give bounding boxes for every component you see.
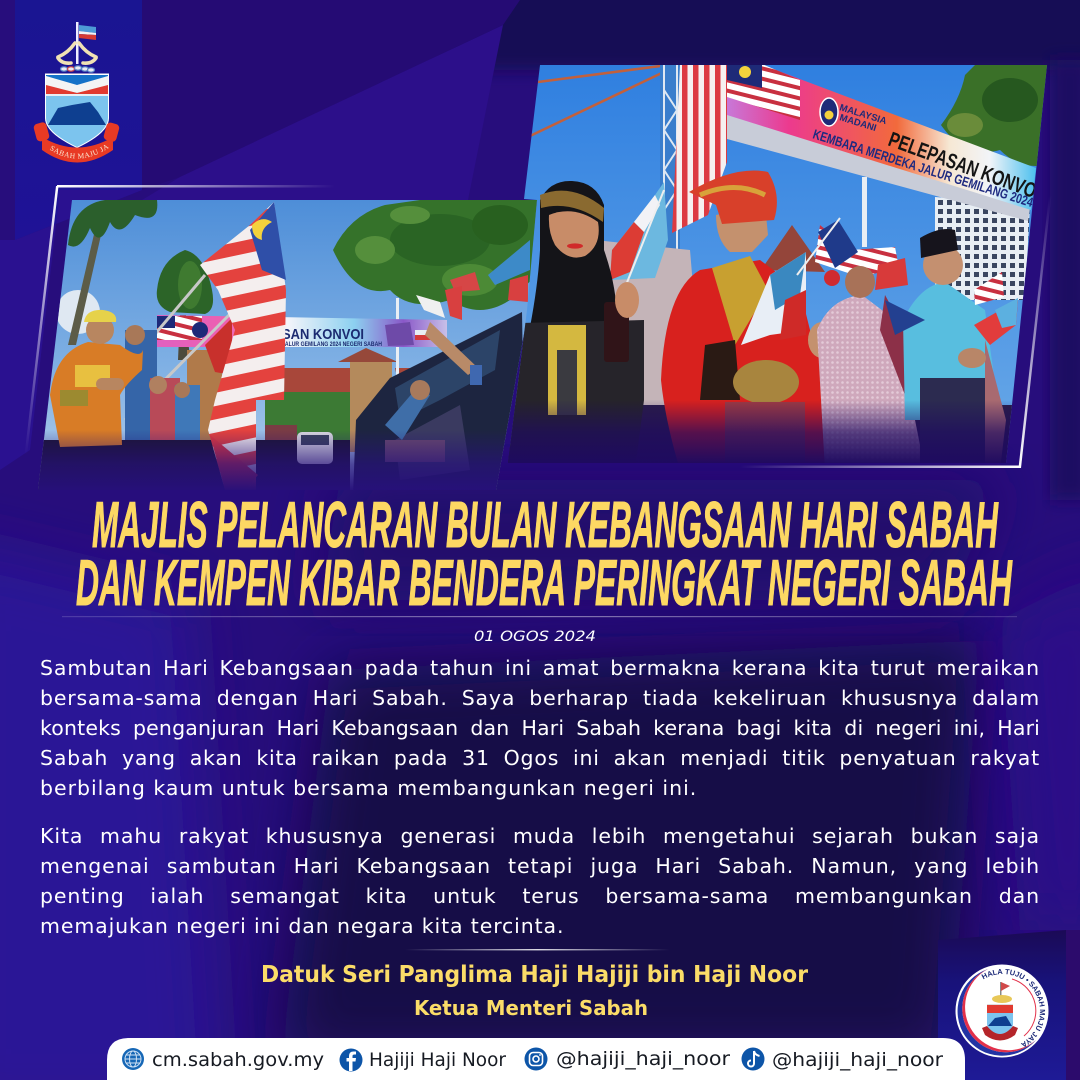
red crescent — [962, 969, 1036, 1052]
paragraph one: konteks penganjuran Hari Kebangsaan dan Hari Sabah kerana bagi kita di negeri ini, Hari — [40, 716, 1040, 740]
arch banner: MALAYSIA — [838, 102, 888, 127]
large Malaysian flag — [200, 202, 286, 490]
Malaysian hand flag — [797, 218, 899, 277]
shield — [45, 74, 109, 151]
signature role: Ketua Menteri Sabah — [414, 996, 648, 1020]
thin red ring — [1012, 979, 1036, 1036]
photo frame right — [740, 195, 1052, 468]
left photo fade — [38, 432, 505, 490]
paragraph one: bersama-sama dengan Hari Sabah. Saya berharap tiada kekeliruan khususnya dalam — [40, 686, 1040, 710]
palm trees — [68, 200, 213, 360]
social bar — [107, 1038, 965, 1080]
clouds — [56, 290, 100, 334]
paragraph one: Sabah yang akan kita raikan pada 31 Ogos ini akan menjadi titik penyatuan rakyat — [40, 746, 1040, 770]
small flags at right — [875, 258, 1018, 345]
title — [76, 488, 1013, 619]
paragraph two: Kita mahu rakyat khususnya generasi muda lebih mengetahui sejarah bukan saja — [40, 824, 1040, 848]
banner: konvoi arch — [157, 315, 447, 348]
divider above signature — [405, 949, 670, 950]
grey panel — [604, 241, 692, 405]
blue crescent — [958, 969, 1036, 1056]
paragraph two — [40, 824, 1040, 938]
cables — [530, 65, 668, 136]
signature name: Datuk Seri Panglima Haji Hajiji bin Haji Noor — [261, 962, 809, 988]
photo frame left — [24, 185, 335, 455]
tower building — [935, 197, 1030, 300]
Sabah flag — [610, 182, 668, 285]
ground under figures — [508, 405, 1012, 462]
paragraph one: berbilang kaum untuk bersama membangunkan negeri ini. — [40, 776, 697, 800]
tiktok link: @hajiji_haji_noor — [772, 1049, 943, 1071]
banner: konvoi arch: JALUR GEMILANG 2024 NEGERI SABAH — [282, 342, 382, 348]
divider under title — [62, 616, 1017, 617]
website link: cm.sabah.gov.my — [152, 1049, 324, 1071]
crowd behind — [30, 325, 350, 495]
arch banner — [727, 64, 1044, 210]
motto scroll — [34, 122, 120, 162]
logo: Hala Tuju badge — [956, 964, 1048, 1058]
logo: Sabah coat of arms — [34, 22, 120, 162]
arch underside — [727, 113, 1030, 221]
right photo fade — [508, 402, 1012, 463]
white car — [297, 432, 333, 464]
gate building — [187, 348, 420, 452]
woman in black hijab — [505, 181, 644, 470]
clasped hands — [58, 43, 96, 63]
dark convoy vehicle — [353, 312, 525, 495]
hanging Malaysian flag — [672, 65, 727, 233]
helm beads — [60, 66, 94, 72]
flag poles — [124, 274, 230, 420]
paragraph two: penting ialah semangat kita untuk terus bersama-sama membangunkan dan — [40, 884, 1040, 908]
small flags — [416, 240, 530, 320]
paragraph two: mengenai sambutan Hari Kebangsaan tetapi juga Hari Sabah. Namun, yang lebih — [40, 854, 1040, 878]
photo: traditional costumes with flags — [500, 64, 1060, 475]
paragraph one: Sambutan Hari Kebangsaan pada tahun ini amat bermakna kerana kita turut meraikan — [40, 656, 1040, 680]
man in turquoise — [903, 229, 1006, 470]
arch banner: MADANI — [838, 112, 878, 134]
paragraph one — [40, 656, 1040, 800]
top right tree — [941, 65, 1047, 166]
tree canopy — [333, 200, 537, 310]
facebook link: Hajiji Haji Noor — [369, 1049, 506, 1071]
paragraph two: memajukan negeri ini dan negara kita tercinta. — [40, 914, 564, 938]
date: 01 OGOS 2024 — [474, 629, 596, 645]
flag and pole — [76, 22, 96, 64]
man in red costume — [661, 171, 836, 470]
truss — [660, 65, 680, 255]
photo: convoy send-off with flag — [20, 200, 540, 500]
woman in lace — [817, 266, 925, 470]
lamp pole — [862, 177, 867, 247]
instagram link: @hajiji_haji_noor — [556, 1048, 730, 1070]
flag pole in background — [396, 298, 399, 375]
red Sabah flag behind pole — [205, 318, 232, 375]
logo: Hala Tuju badge: HALA TUJU • SABAH MAJU JAYA — [981, 969, 1046, 1047]
roof — [761, 225, 825, 272]
man in orange shirt — [50, 310, 143, 447]
badge crest — [982, 982, 1018, 1040]
banner: konvoi arch: SAN KONVOI — [282, 326, 364, 343]
